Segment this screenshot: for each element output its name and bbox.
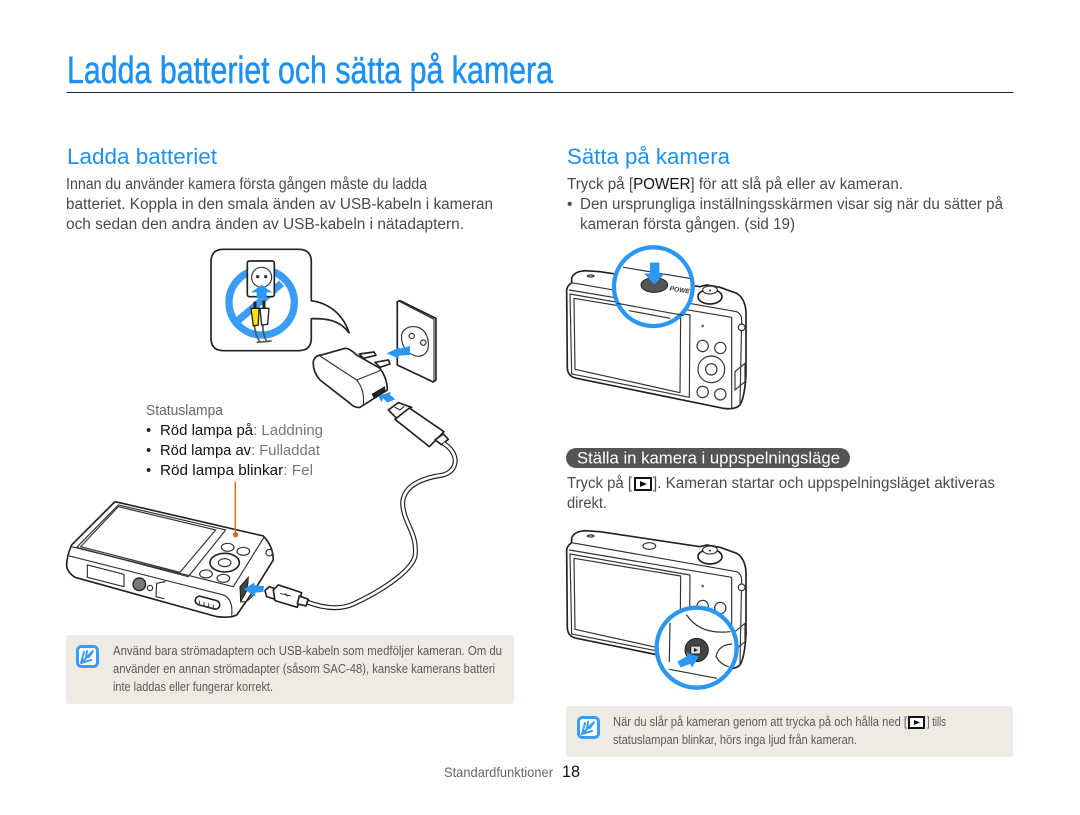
text block: playback note	[613, 714, 946, 747]
text block: playback instructions: ]. Kameran startar och uppspelningsläget aktiveras	[653, 475, 995, 492]
callout: power button magnifier: POWE	[669, 286, 691, 296]
icon: top button	[643, 543, 656, 549]
footer: page label: Standardfunktioner	[444, 764, 553, 780]
text block: adapter warning: använder en annan strömadapter (såsom SAC-48), kanske kamerans batteri	[113, 661, 495, 676]
text block: status lamp legend: Röd lampa blinkar: Fel	[160, 462, 313, 479]
arrow: USB into adapter	[378, 392, 395, 403]
text block: status lamp legend: •	[146, 462, 151, 479]
text block: status lamp legend: Statuslampa	[146, 402, 224, 419]
text block: status lamp legend	[146, 402, 323, 479]
text block: charging intro: Innan du använder kamera första gången måste du ladda	[66, 176, 427, 193]
callout: do not use AV socket	[211, 249, 349, 351]
text block: charging intro: batteriet. Koppla in den smala änden av USB-kabeln i kameran	[66, 196, 493, 213]
heading: Ladda batteriet: Ladda batteriet	[67, 144, 217, 169]
text block: charging intro	[66, 176, 493, 233]
icon: USB cable	[306, 443, 455, 608]
illustration: camera playback button	[567, 531, 746, 688]
indicator: status lamp line	[233, 482, 238, 537]
heading: Sätta på kamera: Sätta på kamera	[567, 144, 731, 169]
text block: status lamp legend: •	[146, 442, 151, 459]
illustration: camera power button	[567, 247, 746, 409]
text block: power instructions: kameran första gången. (sid 19)	[580, 216, 795, 233]
arrow: plug into socket	[387, 346, 410, 358]
text block: status lamp legend: Röd lampa på: Laddning	[160, 422, 323, 439]
text block: adapter warning: inte laddas eller fungerar korrekt.	[113, 679, 273, 694]
callout: playback button magnifier	[657, 608, 737, 688]
icon: camera lying down	[67, 502, 273, 617]
icon: note	[78, 646, 98, 666]
text block: playback instructions: direkt.	[567, 495, 607, 512]
label: playback heading pill: Ställa in kamera i uppspelningsläge	[577, 450, 840, 468]
text block: power instructions: Tryck på [POWER] för att slå på eller av kameran.	[567, 176, 903, 193]
icon: micro USB plug	[265, 585, 308, 607]
text block: status lamp legend: Röd lampa av: Fulladdat	[160, 442, 321, 459]
text block: power instructions: Den ursprungliga inställningsskärmen visar sig när du sätter på	[580, 196, 1003, 213]
illustration: charging setup	[67, 249, 455, 617]
title: Ladda batteriet och sätta på kamera	[67, 50, 554, 92]
footer: page label: 18	[562, 762, 580, 781]
panel: note about adapter	[66, 635, 514, 704]
text block: power instructions	[567, 176, 1003, 233]
icon: note	[578, 718, 598, 738]
callout: power button magnifier	[614, 247, 693, 326]
text block: status lamp legend: •	[146, 422, 151, 439]
text block: playback instructions	[567, 475, 995, 512]
text block: playback note: När du slår på kameran genom att trycka på och hålla ned [	[613, 714, 907, 729]
text block: adapter warning: Använd bara strömadaptern och USB-kabeln som medföljer kameran. Om du	[113, 643, 502, 658]
text block: playback note: ] tills	[927, 714, 946, 729]
text block: power instructions: •	[567, 196, 572, 213]
text block: playback note: statuslampan blinkar, hörs inga ljud från kameran.	[613, 732, 857, 747]
panel: note about playback power-on	[566, 706, 1013, 757]
icon: wall socket	[397, 301, 436, 382]
text block: charging intro: och sedan den andra änden av USB-kabeln i nätadaptern.	[66, 216, 464, 233]
arrow: USB into camera	[244, 583, 264, 597]
text block: adapter warning	[113, 643, 502, 694]
icon: power adapter	[313, 348, 390, 407]
icon: USB plug	[388, 403, 448, 447]
text block: playback instructions: Tryck på [	[567, 475, 633, 492]
